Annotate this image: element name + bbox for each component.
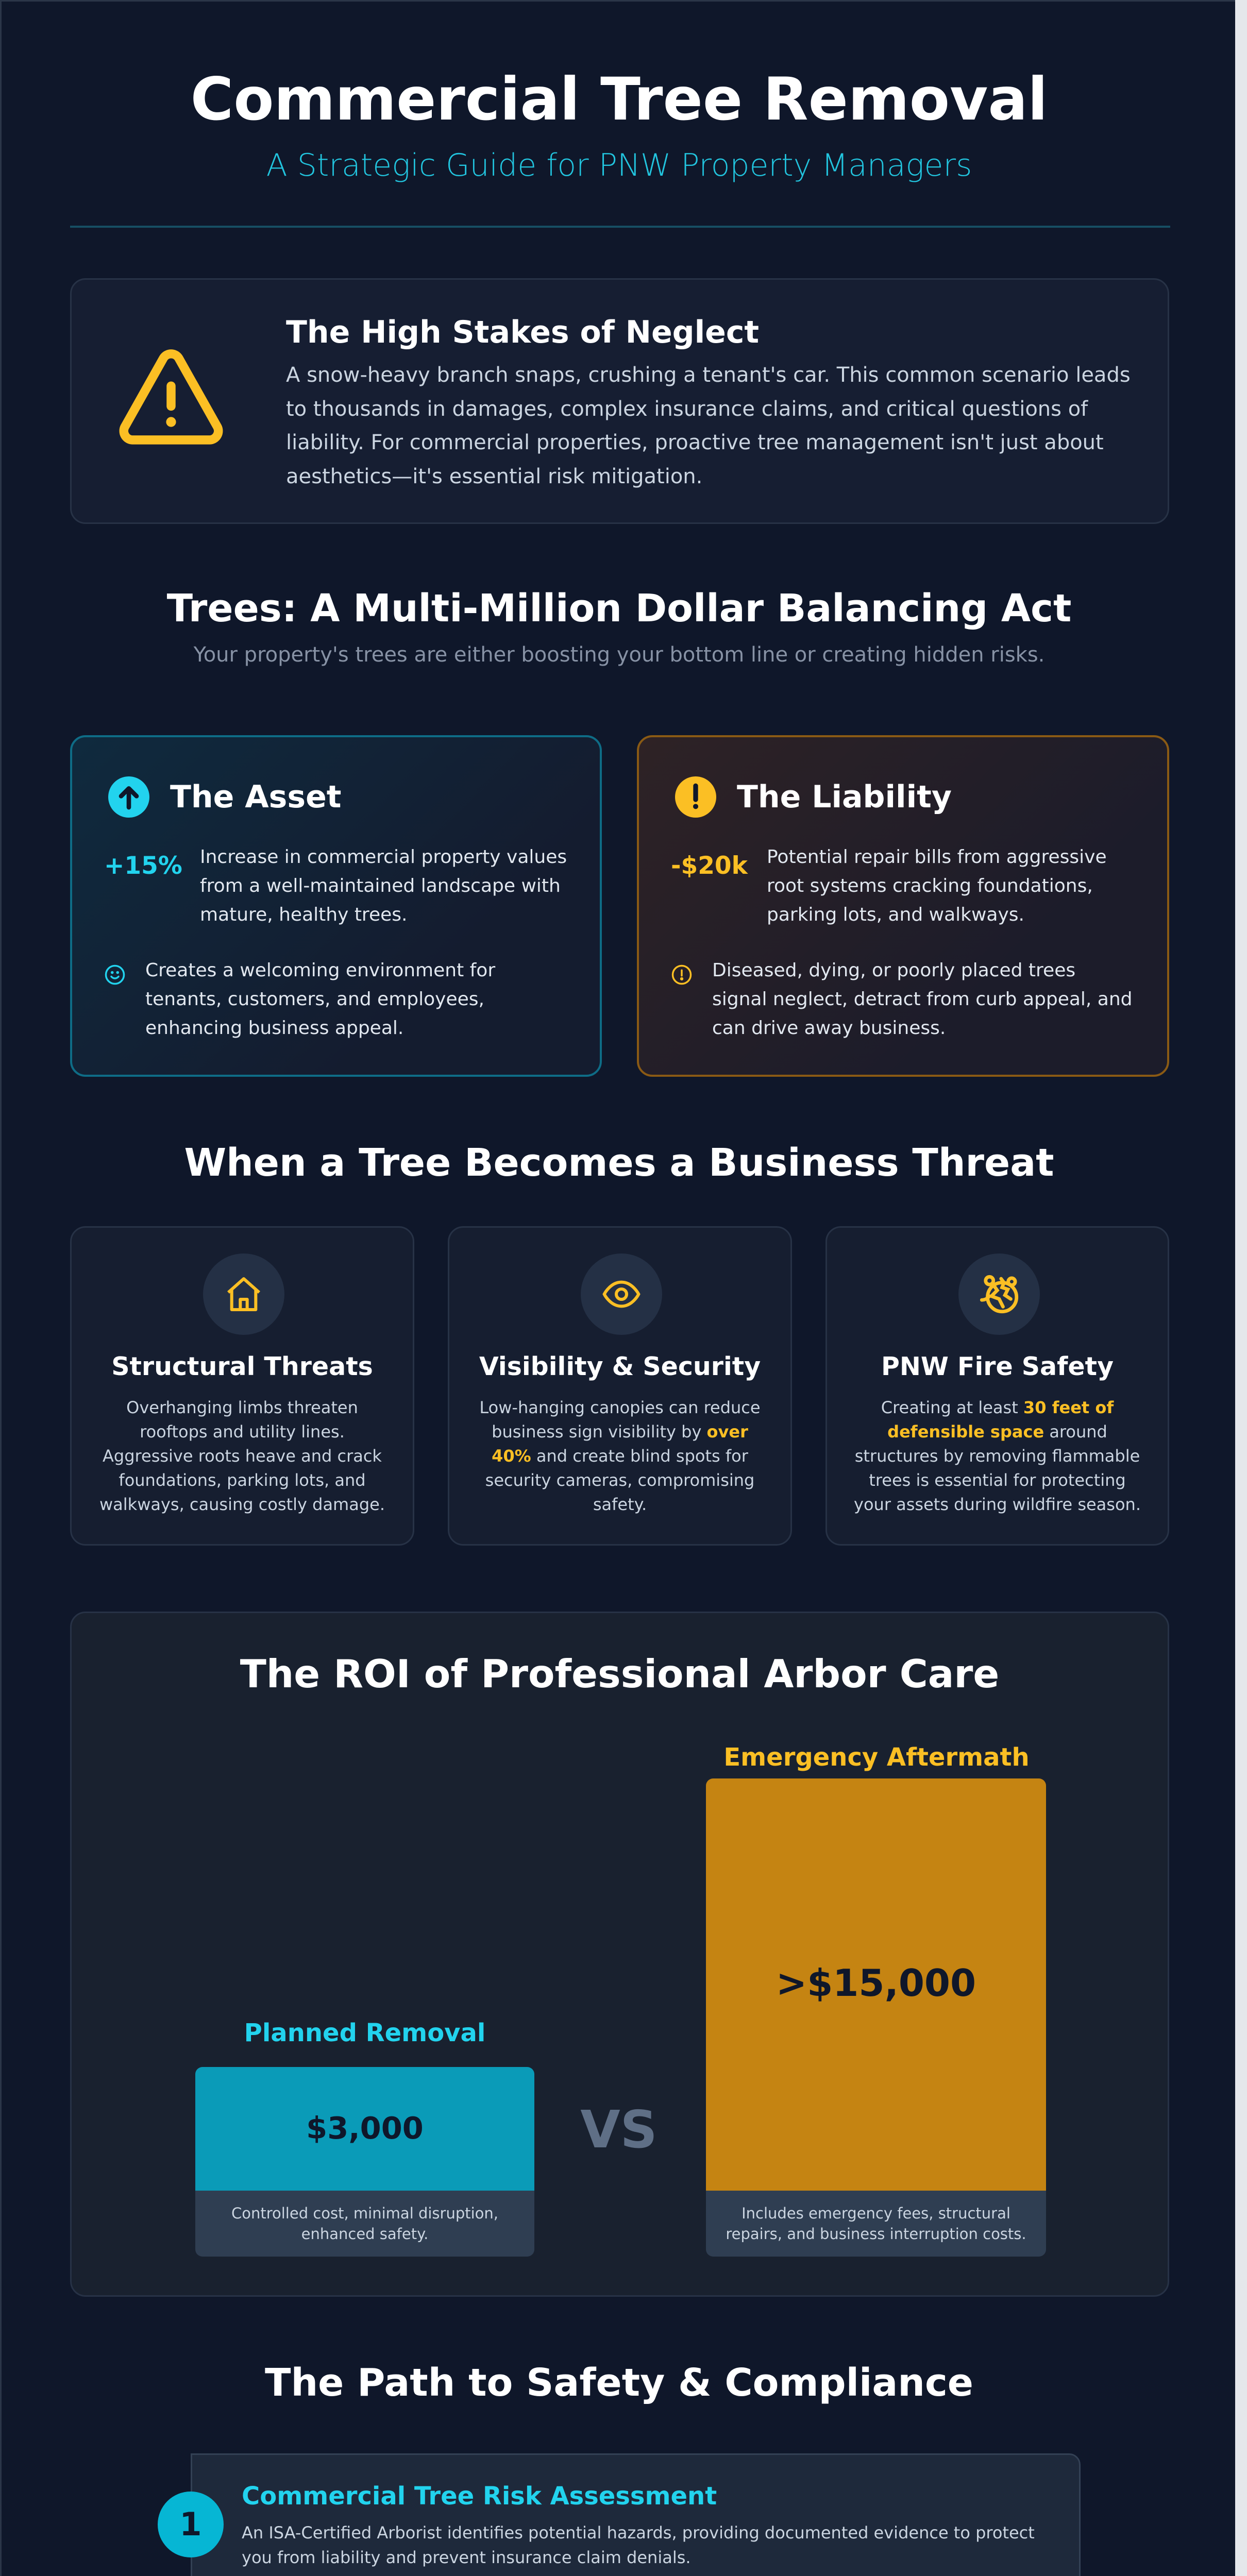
panel: the asset bbox=[70, 735, 602, 1077]
label: Emergency Aftermath bbox=[723, 1743, 1030, 1772]
heading: The Asset bbox=[170, 779, 341, 815]
icon: house bbox=[203, 1253, 284, 1335]
bar: planned removal bbox=[195, 2019, 534, 2257]
bar: emergency aftermath bbox=[706, 1743, 1046, 2257]
caption: Controlled cost, minimal disruption, bbox=[231, 2205, 498, 2222]
heading: business threat: When a Tree Becomes a Business Threat bbox=[184, 1141, 1054, 1185]
icon: fire globe bbox=[958, 1253, 1040, 1335]
text: Potential repair bills from aggressive root systems cracking foundations, parking lots, and walkways. bbox=[767, 846, 1107, 925]
heading: The High Stakes of Neglect bbox=[286, 314, 759, 350]
text: signal neglect, detract from curb appeal, and can drive away business. bbox=[712, 989, 1133, 1039]
text: Aggressive roots heave and crack foundations, parking lots, and walkways, causing costly damage. bbox=[99, 1446, 385, 1514]
heading: Commercial Tree Risk Assessment bbox=[242, 2482, 717, 2511]
panel: PNW fire safety bbox=[825, 1226, 1169, 1546]
icon: up arrow circle bbox=[108, 776, 149, 818]
text: Low-hanging canopies can reduce business sign visibility by over 40% and create blind spots for security cameras, compromising safety. bbox=[479, 1398, 761, 1514]
panel: the liability bbox=[637, 735, 1169, 1077]
text: Diseased, dying, or poorly placed trees bbox=[712, 960, 1075, 981]
title: Commercial Tree Removal bbox=[191, 65, 1048, 133]
stat: -$20k: -$20k bbox=[671, 852, 748, 880]
text bbox=[712, 960, 1133, 1039]
caption bbox=[195, 2191, 534, 2257]
text: Creates a welcoming environment for tenants, customers, and employees, enhancing business appeal. bbox=[145, 960, 495, 1039]
number badge bbox=[158, 2492, 224, 2557]
heading: PNW Fire Safety bbox=[881, 1352, 1114, 1381]
text block: A snow-heavy branch snaps, crushing a tenant's car. This common scenario leads to thousands in damages, complex insurance claims, and critical questions of liability. For commercial properties, proactive tree management isn't just about aesthetics—it's essential risk mitigation. bbox=[286, 363, 1131, 488]
text bbox=[99, 1398, 385, 1514]
panel: ROI chart bbox=[70, 1612, 1169, 2297]
heading: path to safety: The Path to Safety & Compliance bbox=[265, 2361, 973, 2405]
subtitle: A Strategic Guide for PNW Property Managers bbox=[266, 147, 972, 183]
subheading: Your property's trees are either boosting your bottom line or creating hidden risks. bbox=[194, 643, 1044, 667]
label: Planned Removal bbox=[244, 2019, 485, 2047]
heading: Structural Threats bbox=[111, 1352, 373, 1381]
step 1 bbox=[158, 2453, 1081, 2576]
icon: smiley bbox=[105, 964, 125, 985]
caption: Includes emergency fees, structural bbox=[742, 2205, 1010, 2222]
number badge: 1 bbox=[179, 2505, 202, 2543]
icon: warning triangle bbox=[120, 349, 223, 445]
value: $3,000 bbox=[306, 2110, 424, 2146]
panel: high stakes of neglect bbox=[70, 278, 1169, 524]
text: Overhanging limbs threaten bbox=[126, 1398, 358, 1417]
heading: Visibility & Security bbox=[479, 1352, 761, 1381]
caption: repairs, and business interruption costs. bbox=[726, 2225, 1026, 2243]
panel: visibility & security bbox=[448, 1226, 792, 1546]
caption bbox=[706, 2191, 1046, 2257]
text: rooftops and utility lines. bbox=[140, 1422, 345, 1442]
heading: The ROI of Professional Arbor Care bbox=[240, 1651, 999, 1697]
heading: balancing act: Trees: A Multi-Million Dollar Balancing Act bbox=[167, 586, 1071, 631]
text: Creating at least 30 feet of defensible space around structures by removing flammable trees is essential for protecting your assets during wildfire season. bbox=[854, 1398, 1141, 1514]
icon: exclamation circle bbox=[675, 776, 716, 818]
text: An ISA-Certified Arborist identifies potential hazards, providing documented evidence to protect you from liability and prevent insurance claim denials. bbox=[242, 2523, 1035, 2567]
text: Increase in commercial property values from a well-maintained landscape with mature, healthy trees. bbox=[200, 846, 567, 925]
icon: alert circle bbox=[672, 964, 692, 985]
value: >$15,000 bbox=[776, 1961, 976, 2005]
icon: eye bbox=[581, 1253, 662, 1335]
VS label: VS bbox=[580, 2099, 658, 2160]
caption: enhanced safety. bbox=[301, 2225, 428, 2243]
panel: structural threats bbox=[70, 1226, 414, 1546]
heading: The Liability bbox=[737, 779, 952, 815]
stat: +15%: +15% bbox=[104, 852, 182, 880]
